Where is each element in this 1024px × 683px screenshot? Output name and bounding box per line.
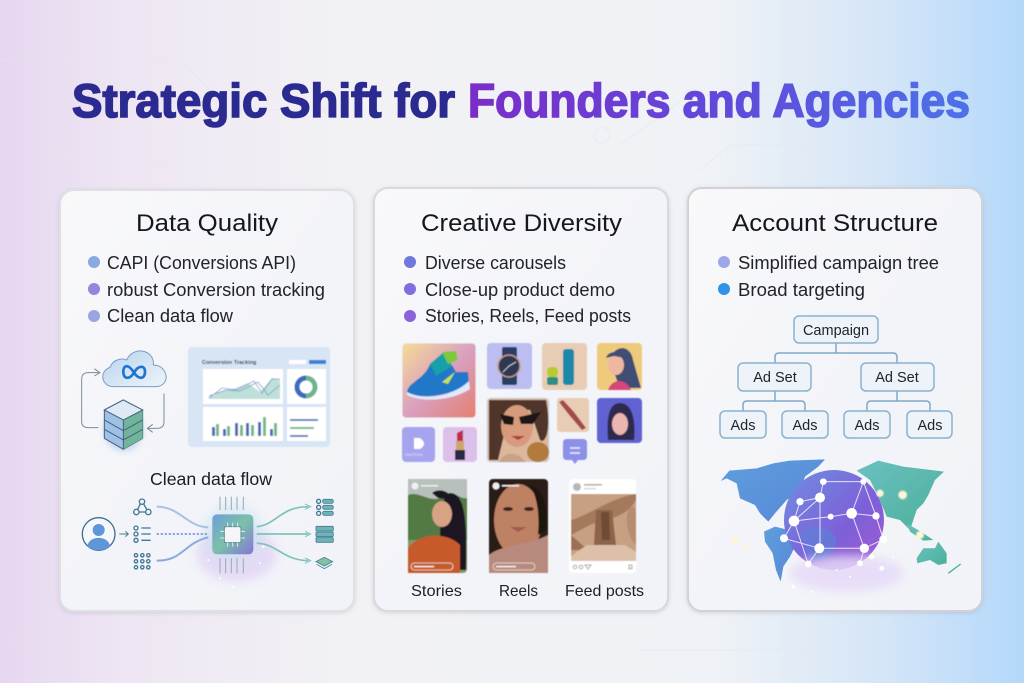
- label: feed posts: Feed posts: [565, 583, 644, 600]
- label: stories: Stories: [411, 583, 462, 600]
- bullet list: account structure: [718, 253, 939, 300]
- dashboard: conversion tracking: Conversion Tracking: [202, 360, 256, 366]
- campaign tree: Ads: [918, 418, 942, 434]
- panel: data quality: [60, 190, 354, 611]
- image tile: logo: FASTFOLK: [405, 453, 424, 457]
- campaign tree: Ad Set: [875, 370, 919, 386]
- bullet list: data quality: [88, 253, 325, 326]
- icon: meta cloud and server loop: [82, 351, 166, 452]
- dashboard: conversion tracking: [188, 347, 330, 447]
- bullet list: data quality: robust Conversion tracking: [107, 280, 325, 300]
- diagram: clean data flow: [82, 497, 333, 589]
- icon: user: [82, 518, 115, 550]
- subheading: clean data flow: Clean data flow: [150, 469, 272, 489]
- icon: chat bubble: [563, 439, 587, 464]
- title: [72, 74, 970, 127]
- bullet list: creative diversity: Stories, Reels, Feed posts: [425, 306, 631, 326]
- bullet list: account structure: Broad targeting: [738, 280, 865, 300]
- image tile: bottle: [542, 343, 587, 390]
- image tile: sneaker: [402, 343, 476, 418]
- campaign tree: Ads: [792, 418, 818, 434]
- label: reels: Reels: [499, 583, 538, 600]
- campaign tree: Ads: [730, 418, 756, 434]
- image tile: woman with sunglasses: [487, 398, 549, 462]
- panel: creative diversity: [374, 188, 668, 611]
- donut chart: [297, 378, 315, 396]
- title: Founders and Agencies: [468, 74, 970, 127]
- panel: account structure: [688, 188, 982, 611]
- campaign tree: [720, 316, 952, 438]
- bar chart: [212, 422, 273, 436]
- campaign tree: Ads: [854, 418, 880, 434]
- image tile: lip gloss: [557, 398, 589, 432]
- world map with network globe: [721, 459, 961, 593]
- post card: feed: [569, 479, 636, 573]
- progress bars: [290, 419, 318, 421]
- line chart: [209, 378, 280, 399]
- image tile: lipstick: [443, 427, 477, 462]
- bullet list: creative diversity: Diverse carousels: [425, 253, 566, 273]
- phone: stories: [408, 479, 467, 573]
- phone: reels: [489, 479, 548, 573]
- heading: creative diversity: Creative Diversity: [421, 210, 622, 237]
- bullet list: data quality: Clean data flow: [107, 306, 234, 326]
- image tile: portrait with ponytail: [597, 343, 642, 390]
- bullet list: creative diversity: Close-up product demo: [425, 280, 615, 300]
- heading: account structure: Account Structure: [732, 210, 938, 237]
- campaign tree: Campaign: [803, 323, 869, 339]
- title: Strategic Shift for: [72, 74, 455, 127]
- image tile: logo: [402, 427, 435, 462]
- bullet list: data quality: CAPI (Conversions API): [107, 253, 296, 273]
- image tile: watch: [487, 343, 532, 389]
- bullet list: account structure: Simplified campaign tree: [738, 253, 939, 273]
- image tile: portrait on blue: [597, 398, 642, 443]
- heading: data quality: Data Quality: [136, 210, 278, 237]
- bullet list: creative diversity: [404, 253, 631, 326]
- campaign tree: Ad Set: [753, 370, 797, 386]
